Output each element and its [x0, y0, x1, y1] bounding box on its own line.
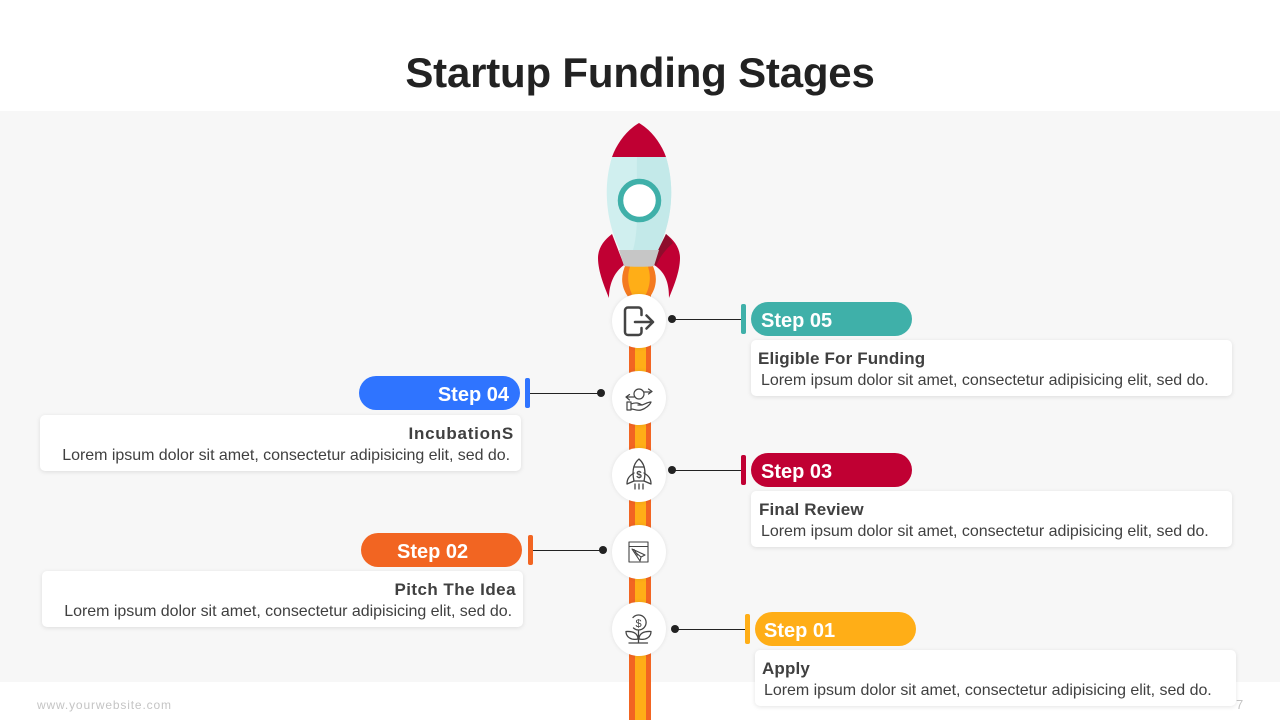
- label pill: Step 03: [761, 461, 832, 483]
- description card: Final Review: [759, 500, 864, 519]
- rocket body: [607, 157, 671, 250]
- left fin: [598, 234, 624, 298]
- label pill: Step 02: [397, 541, 468, 563]
- node: step 01 icon: [612, 602, 666, 656]
- tick: [528, 535, 532, 565]
- tick: [525, 378, 530, 408]
- panel: step 04: [39, 376, 530, 473]
- rocket window: [620, 182, 658, 220]
- description card: [755, 650, 1236, 706]
- footer website: www.yourwebsite.com: [37, 698, 172, 712]
- description card: Apply: [762, 659, 810, 678]
- node: step 01 icon: $: [635, 618, 642, 630]
- label pill: [751, 453, 912, 487]
- label pill: Step 01: [764, 620, 835, 642]
- node: step 03 icon: [612, 448, 666, 502]
- background band: [0, 111, 1280, 682]
- page number: 7: [1236, 697, 1244, 712]
- connector: step 01: [671, 625, 745, 633]
- tick: [745, 614, 750, 644]
- description card: Lorem ipsum dolor sit amet, consectetur adipisicing elit, sed do.: [62, 447, 510, 464]
- description card: Eligible For Funding: [758, 349, 925, 368]
- tick: [741, 455, 746, 485]
- rocket nose: [612, 123, 666, 157]
- icon: rocket: [598, 123, 680, 298]
- description card: [40, 415, 521, 471]
- label pill: Step 04: [438, 384, 509, 406]
- description card: Lorem ipsum dolor sit amet, consectetur adipisicing elit, sed do.: [761, 523, 1209, 540]
- description card: [751, 491, 1232, 547]
- node: step 04 icon: [612, 371, 666, 425]
- right fin: [652, 234, 680, 298]
- connector: step 02: [533, 546, 607, 554]
- panel: step 05: [741, 302, 1233, 398]
- connector: step 03: [668, 466, 741, 474]
- description card: Lorem ipsum dolor sit amet, consectetur adipisicing elit, sed do.: [761, 372, 1209, 389]
- node: step 03 icon: $: [636, 470, 642, 481]
- rocket base: [619, 250, 659, 267]
- node: step 02 icon: [612, 525, 666, 579]
- title: Startup Funding Stages: [405, 49, 875, 96]
- node: step 05 icon: [612, 294, 666, 348]
- panel: step 01: [745, 612, 1237, 708]
- panel: step 03: [741, 453, 1233, 549]
- connector: step 04: [530, 389, 605, 397]
- description card: Lorem ipsum dolor sit amet, consectetur adipisicing elit, sed do.: [764, 682, 1212, 699]
- connector: step 05: [668, 315, 741, 323]
- description card: Lorem ipsum dolor sit amet, consectetur adipisicing elit, sed do.: [64, 603, 512, 620]
- description card: Pitch The Idea: [394, 580, 516, 599]
- tick: [741, 304, 746, 334]
- description card: IncubationS: [408, 424, 514, 443]
- label pill: [359, 376, 520, 410]
- description card: [751, 340, 1232, 396]
- rocket trail: [629, 290, 651, 720]
- label pill: [361, 533, 522, 567]
- panel: step 02: [41, 533, 533, 629]
- label pill: [751, 302, 912, 336]
- label pill: Step 05: [761, 310, 832, 332]
- flame: [622, 264, 656, 298]
- description card: [42, 571, 523, 627]
- body shade: [633, 157, 671, 250]
- label pill: [755, 612, 916, 646]
